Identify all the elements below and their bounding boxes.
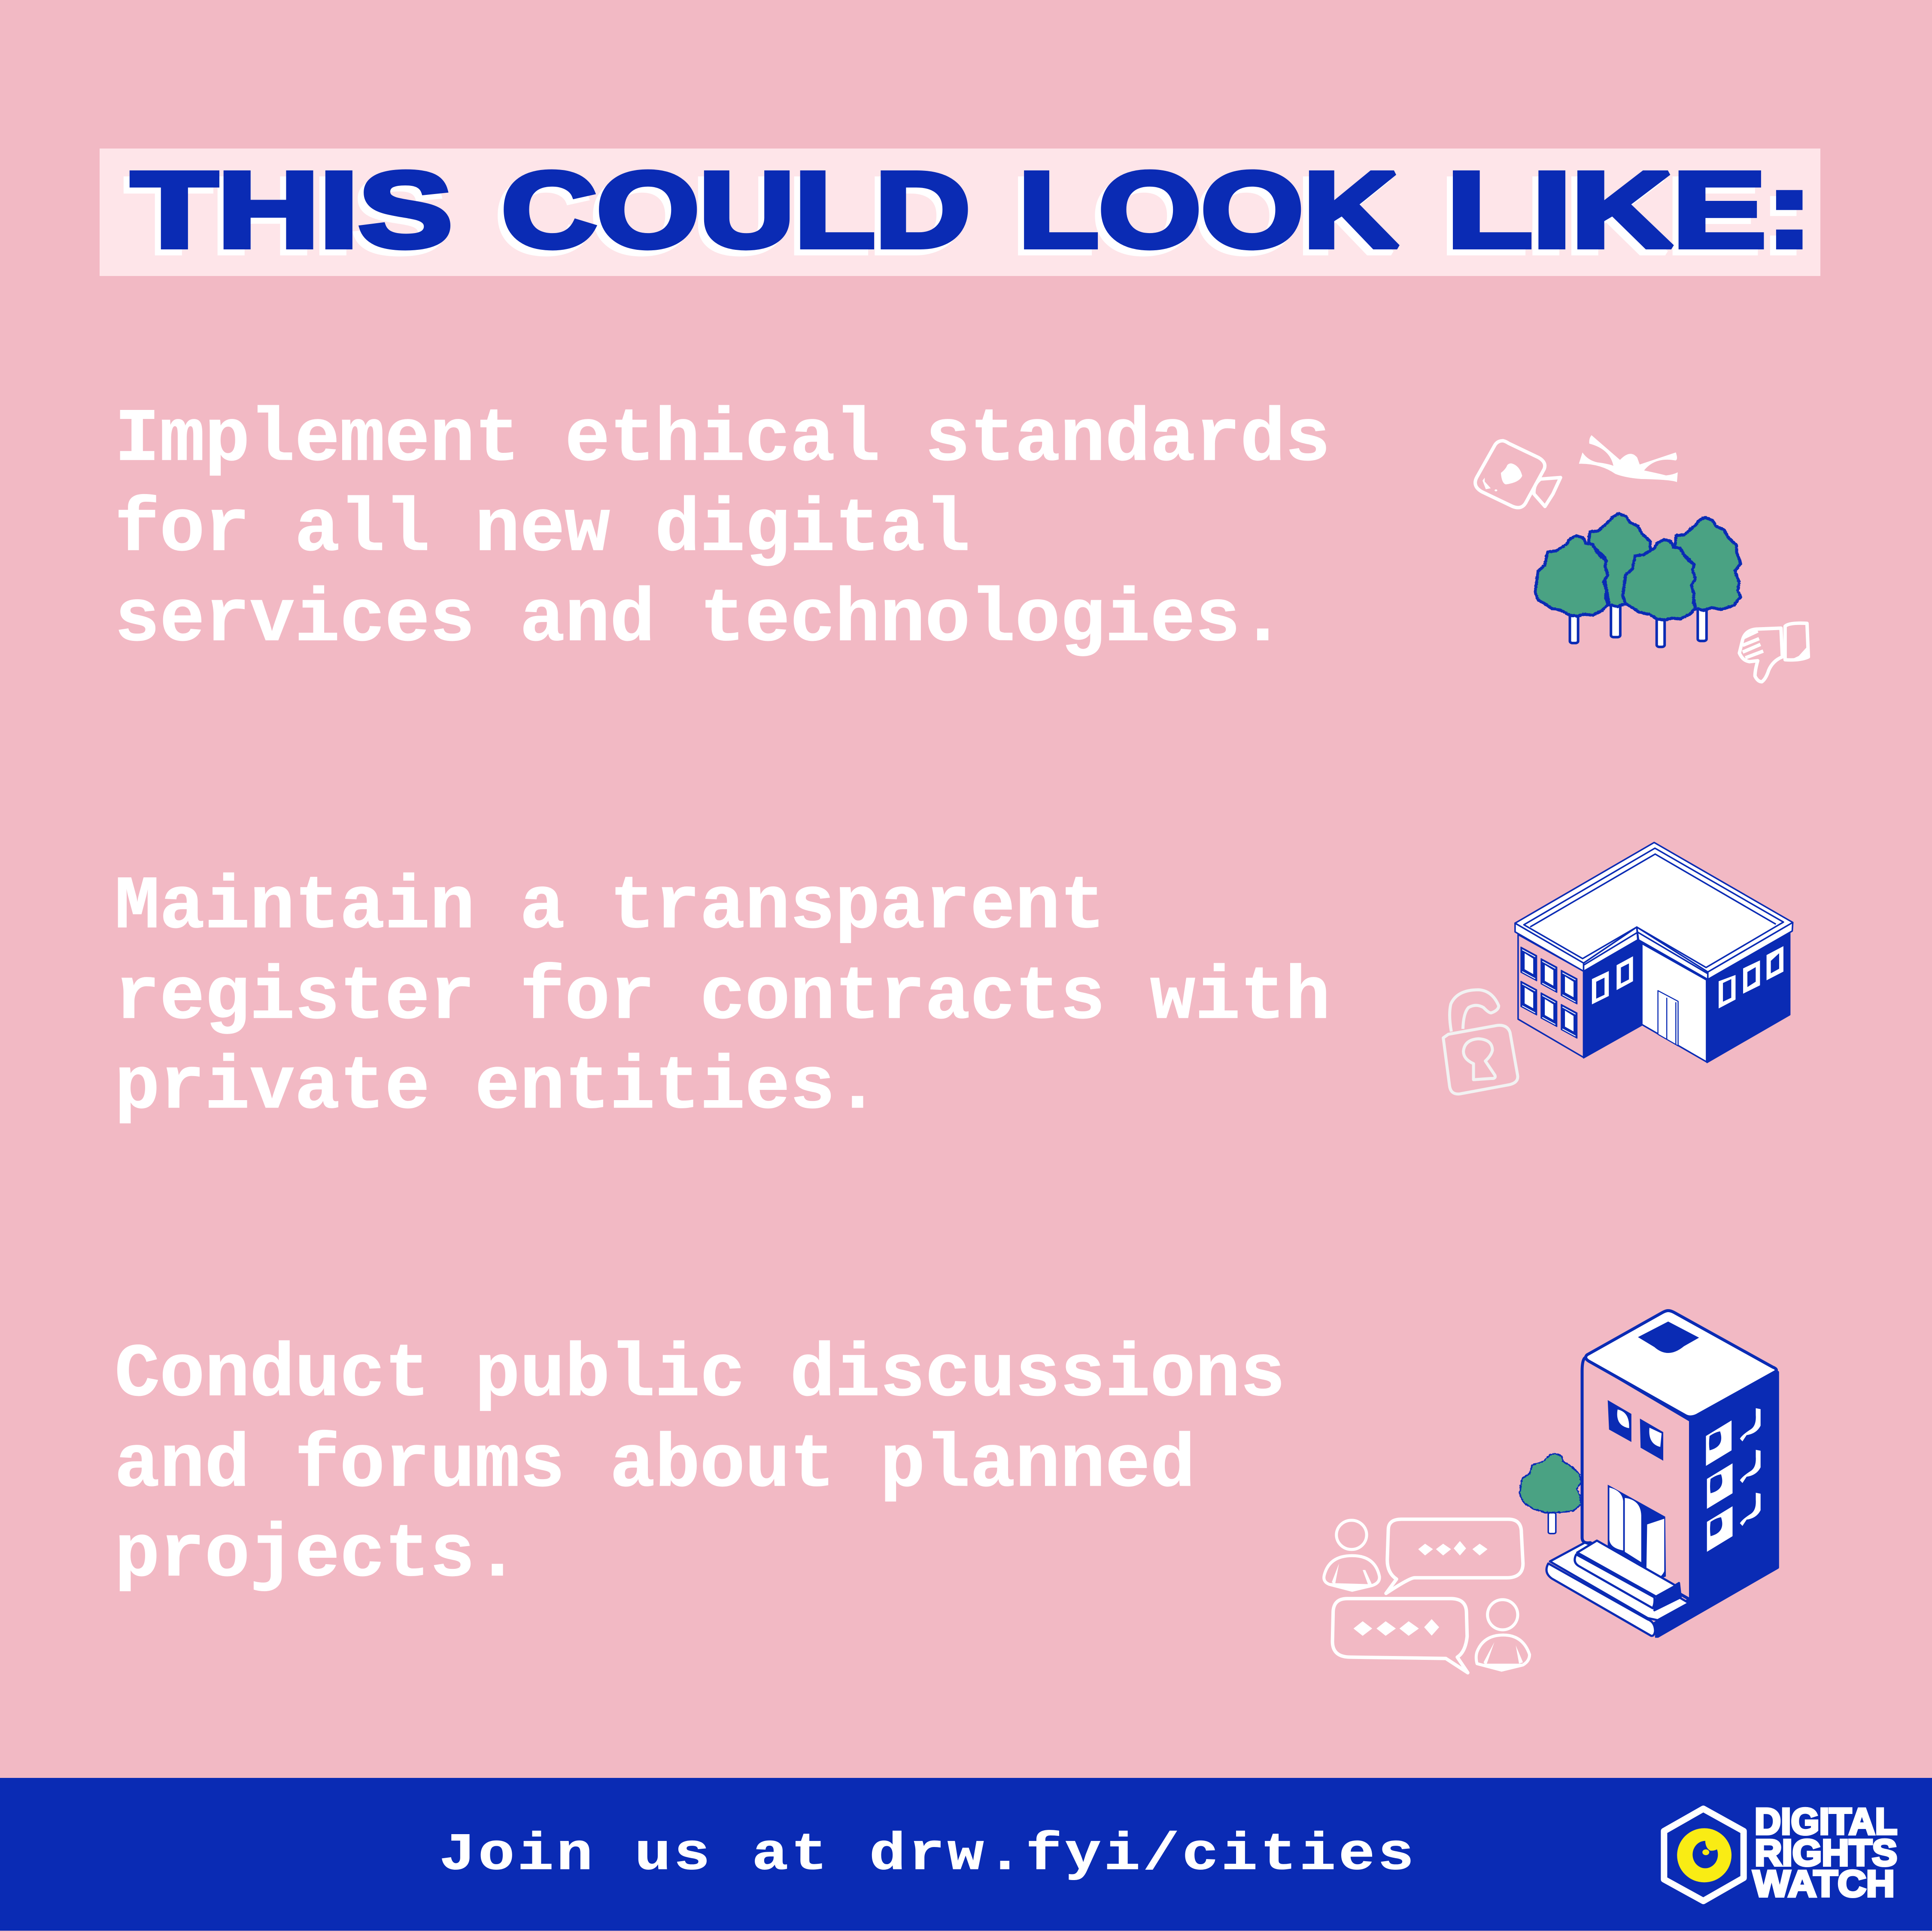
- title shadow: COULD: [495, 156, 964, 276]
- logo wordmark: [1753, 1801, 1897, 1905]
- title shadow: LOOK: [1012, 156, 1392, 276]
- logo wordmark: WATCH: [1753, 1863, 1895, 1905]
- speech bubble lower: [1333, 1598, 1468, 1673]
- icon: thumbs down: [1739, 623, 1808, 682]
- icon: small tree: [1519, 1453, 1580, 1534]
- text block: transparent register: Maintain a transparent: [115, 864, 1105, 950]
- text block: public discussions: and forums about planned: [115, 1423, 1195, 1508]
- icon: open padlock: [1443, 990, 1518, 1094]
- entrance doors: [1608, 1485, 1666, 1585]
- text block: transparent register: private entities.: [115, 1045, 880, 1130]
- icon: camera: [1475, 441, 1561, 508]
- title shadow: LIKE:: [1441, 156, 1807, 276]
- icon: trees: [1534, 513, 1740, 647]
- title text: THIS: [131, 150, 453, 270]
- text block: ethical standards: services and technologies.: [115, 577, 1285, 663]
- logo: Digital Rights Watch: [1664, 1801, 1897, 1905]
- title banner: [100, 149, 1820, 276]
- title text: LIKE:: [1447, 150, 1813, 270]
- text block: public discussions: Conduct public discussions: [115, 1332, 1285, 1418]
- title text: [131, 150, 1813, 270]
- illustration: trees, camera, swimmer, thumbs down: [1475, 435, 1808, 682]
- text block: ethical standards: Implement ethical standards: [115, 397, 1330, 482]
- footer band: [0, 1778, 1932, 1931]
- windows: front wall: [1608, 1400, 1663, 1461]
- title text: LOOK: [1018, 150, 1398, 270]
- title shadow: [125, 156, 1807, 276]
- text block: ethical standards: [115, 397, 1330, 663]
- text block: transparent register: register for contracts with: [115, 955, 1330, 1040]
- windows: side wall: [1706, 1409, 1760, 1552]
- tall building body: [1582, 1310, 1777, 1636]
- icon: swimmer: [1579, 435, 1678, 482]
- footer call to action: Join us at drw.fyi/cities: [439, 1826, 1417, 1885]
- title shadow: THIS: [125, 156, 447, 276]
- windows: blue walls: [1592, 946, 1783, 1008]
- windows: pink wall: [1521, 947, 1577, 1038]
- text block: public discussions: [115, 1332, 1285, 1598]
- entrance steps: [1546, 1541, 1777, 1637]
- door: [1658, 991, 1678, 1046]
- logo wordmark: DIGITAL: [1755, 1801, 1897, 1842]
- logo wordmark: RIGHTS: [1755, 1832, 1897, 1874]
- icon: person right: [1476, 1600, 1530, 1670]
- illustration: tall building, tree and discussion: [1324, 1310, 1777, 1673]
- illustration: flat-roof building and open padlock: [1443, 843, 1793, 1094]
- icon: person left: [1324, 1520, 1379, 1590]
- text block: transparent register: [115, 864, 1330, 1130]
- text block: public discussions: projects.: [115, 1513, 520, 1598]
- roof hatch: [1638, 1322, 1699, 1353]
- speech bubble upper: [1386, 1519, 1523, 1593]
- building roof: [1515, 843, 1793, 980]
- text block: ethical standards: for all new digital: [115, 487, 970, 573]
- building walls: [1518, 933, 1790, 1062]
- logo mark: hexagon eye: [1664, 1809, 1744, 1901]
- title text: COULD: [501, 150, 970, 270]
